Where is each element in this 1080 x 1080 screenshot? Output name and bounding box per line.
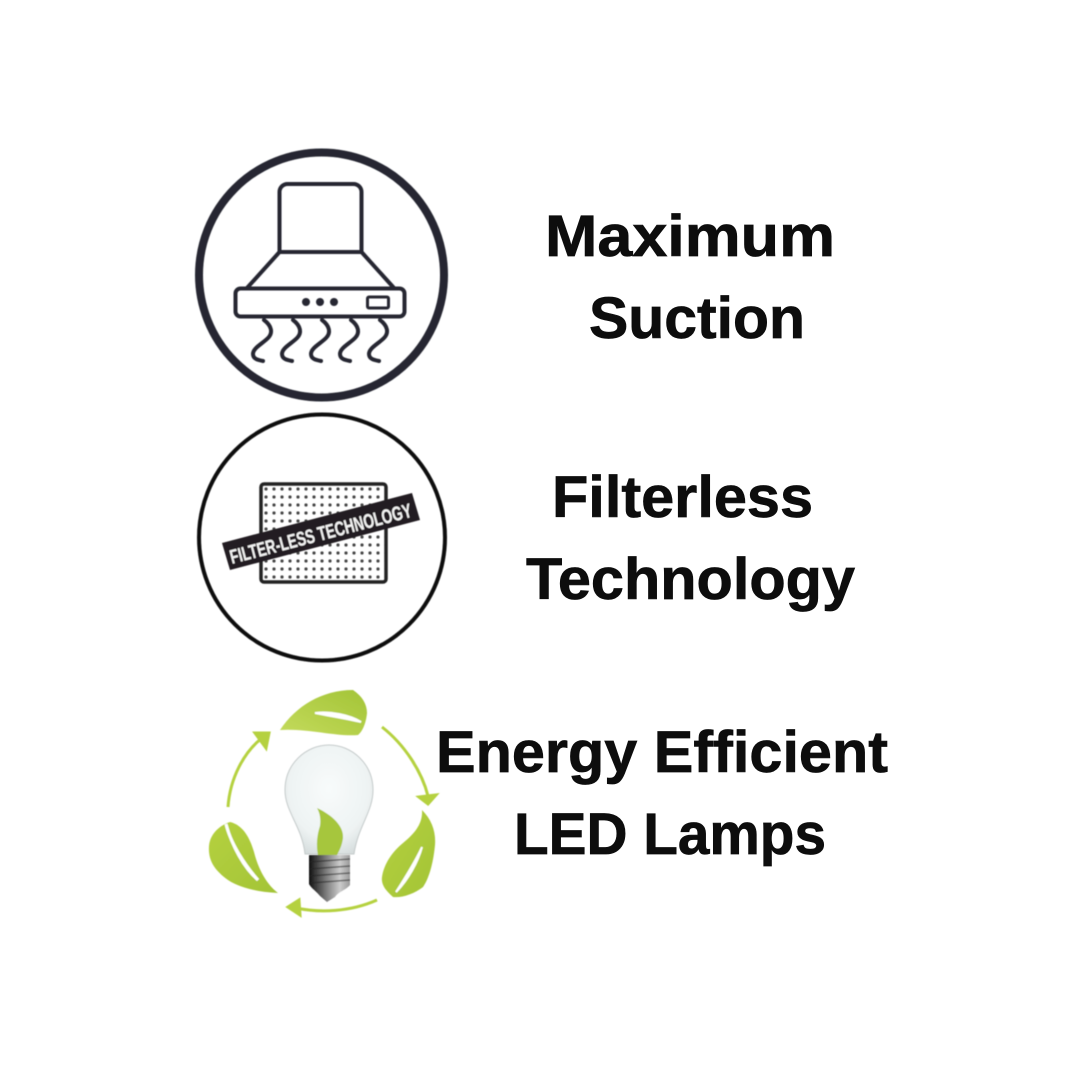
display switch <box>368 297 388 308</box>
hood control panel <box>236 288 404 316</box>
hood canopy <box>247 252 394 288</box>
bulb glass <box>285 745 373 854</box>
filter-less banner <box>222 493 420 570</box>
heading: Maximum Suction: Suction <box>589 286 805 351</box>
banner text: FILTER-LESS TECHNOLOGY <box>228 500 415 569</box>
top leaf vein <box>315 712 361 722</box>
arrow: left <box>228 733 269 807</box>
perforated filter panel <box>261 484 386 582</box>
hood chimney duct <box>280 184 362 252</box>
bulb inner leaf <box>317 808 343 855</box>
icon ring: filter <box>199 414 445 660</box>
suction air squiggles <box>253 320 387 361</box>
bulb screw base <box>309 855 350 902</box>
arrow: right <box>382 727 436 804</box>
top leaf <box>280 690 367 735</box>
icon: filter-less technology in circle <box>199 414 445 660</box>
heading: Maximum Suction: Maximum <box>545 204 835 269</box>
base screw threads <box>309 859 350 883</box>
arrow: bottom <box>288 900 377 915</box>
heading: Filterless Technology <box>526 465 855 612</box>
heading: Energy Efficient LED Lamps <box>436 720 888 867</box>
left leaf vein <box>226 824 258 880</box>
right leaf <box>382 810 435 897</box>
control buttons <box>302 298 338 306</box>
heading: Maximum Suction <box>545 204 835 351</box>
left leaf <box>209 822 278 893</box>
icon: LED bulb with recycling leaves <box>209 690 436 915</box>
heading: Filterless Technology: Filterless <box>552 465 813 530</box>
heading: Energy Efficient LED Lamps: Energy Efficient <box>436 720 888 785</box>
right leaf vein <box>396 847 422 892</box>
icon ring: hood <box>199 152 444 398</box>
heading: Energy Efficient LED Lamps: LED Lamps <box>514 802 826 867</box>
heading: Filterless Technology: Technology <box>526 547 855 612</box>
icon: kitchen chimney hood in circle <box>199 152 444 398</box>
